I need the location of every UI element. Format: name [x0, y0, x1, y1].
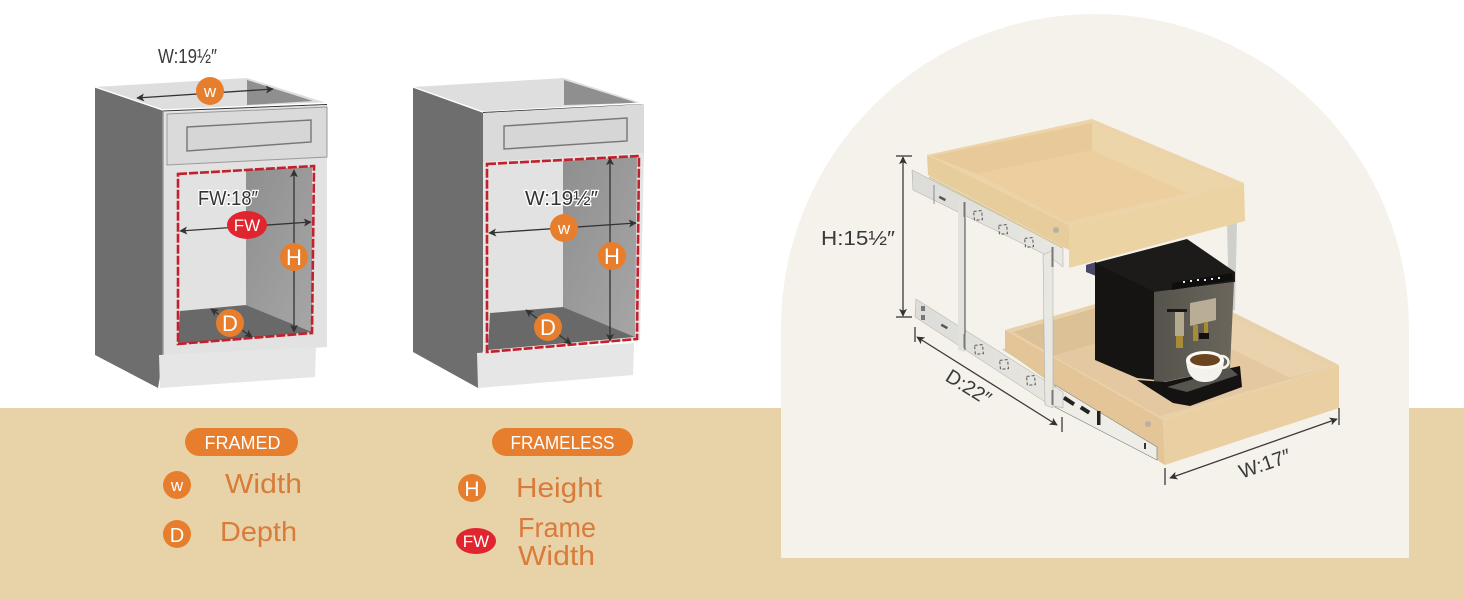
legend: frameless — [456, 428, 633, 571]
vertical posts — [958, 200, 1054, 408]
badge: w: w — [203, 82, 217, 101]
badge: FW: FW — [234, 216, 260, 235]
width dimension — [1165, 408, 1339, 485]
badge: H: H — [286, 245, 302, 270]
cabinet body: framed — [95, 78, 327, 388]
panel: frameless cabinet diagram — [413, 78, 644, 388]
badge: w — [196, 77, 224, 105]
badge: H: H — [604, 244, 620, 269]
coffee cup — [1186, 351, 1229, 382]
legend item: width — [163, 468, 302, 499]
legend item: frame width: FW — [463, 532, 489, 551]
badge: FW — [227, 211, 267, 239]
cabinet body: frameless — [413, 78, 644, 388]
badge: H — [598, 242, 626, 270]
legend item: width: Width — [225, 468, 302, 499]
legend item: height — [458, 472, 602, 503]
legend item: depth — [163, 516, 297, 548]
pull-out shelf product illustration — [821, 119, 1339, 485]
upper drawer — [927, 119, 1245, 268]
legend: framed — [163, 428, 302, 548]
panel: arched background — [781, 14, 1409, 558]
lower drawer — [1005, 282, 1339, 465]
legend item: depth: D — [170, 525, 184, 547]
pill: FRAMELESS — [492, 428, 633, 456]
extended lower rail — [1055, 385, 1157, 460]
frame opening outline — [487, 156, 639, 352]
legend item: frame width: Frame — [518, 512, 596, 543]
legend item: depth: Depth — [220, 516, 297, 547]
depth arrow — [526, 310, 571, 344]
panel: framed cabinet diagram — [95, 46, 327, 388]
badge: D — [534, 313, 562, 341]
depth dimension — [915, 327, 1062, 432]
width arrow — [489, 223, 636, 233]
depth dimension: D:22″ — [941, 366, 995, 410]
depth arrow — [211, 309, 252, 337]
badge: w — [550, 214, 578, 242]
top width arrow — [137, 89, 273, 98]
frame opening outline — [178, 166, 314, 344]
pill: FRAMED: FRAMED — [204, 433, 280, 453]
label: W 19 1/2: W:19½″ — [525, 188, 598, 210]
badge: D: D — [540, 315, 556, 340]
badge: w: w — [557, 219, 571, 238]
legend item: width: w — [170, 476, 184, 495]
pill: FRAMELESS: FRAMELESS — [510, 433, 614, 453]
back post — [1227, 222, 1237, 312]
badge: D — [216, 309, 244, 337]
width dimension: W:17″ — [1236, 445, 1294, 483]
badge: H — [280, 243, 308, 271]
legend item: frame width — [456, 512, 596, 571]
height arrow — [609, 158, 611, 341]
lower slide rail — [915, 299, 1063, 408]
height arrow — [293, 170, 295, 332]
coffee machine — [1086, 239, 1242, 406]
background band — [0, 408, 1464, 600]
label: FW 18: FW:18″ — [198, 188, 258, 210]
legend item: height: H — [464, 478, 480, 501]
upper slide rail — [912, 170, 1063, 267]
legend item: height: Height — [516, 472, 602, 503]
label: W 19 1/2: W:19½″ — [158, 46, 217, 68]
height dimension: H:15½″ — [821, 228, 895, 250]
legend item: frame width: Width — [518, 540, 595, 571]
frame width arrow — [180, 222, 311, 231]
badge: D: D — [222, 311, 238, 336]
